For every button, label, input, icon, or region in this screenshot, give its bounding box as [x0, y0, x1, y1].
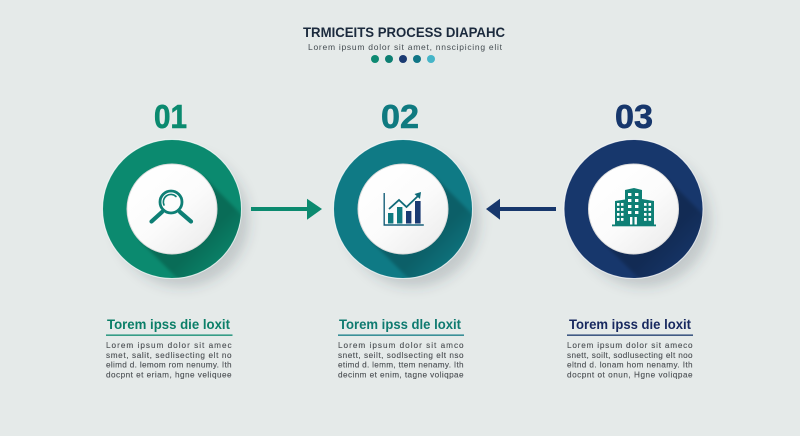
step 1 circle — [102, 139, 254, 292]
arrow: step 3 to step 2 — [486, 199, 556, 220]
subtitle: Lorem ipsum dolor sit amet, nnscipicing elit — [308, 42, 503, 52]
step 2 heading: Torem ipss dle loxit — [339, 317, 461, 332]
step 2 number: 02 — [381, 98, 419, 135]
panel: step 2 text — [338, 317, 464, 380]
header — [303, 24, 505, 63]
panel: step 3 text — [567, 317, 693, 380]
step 3 body text: eltnd d. lonam hom nenamy. Ith — [567, 360, 693, 370]
step 1 number: 01 — [154, 98, 187, 135]
step 3 body text: docpnt ot onun, Hgne voliqpae — [567, 370, 693, 380]
icon: growth chart — [384, 192, 424, 225]
step 3 body text: snett, soilt, sodlusecting elt noo — [567, 351, 693, 360]
step 1 body text — [106, 341, 232, 380]
step 3 circle — [564, 139, 716, 292]
step 2 body text: Lorem ipsum dolor sit amco — [338, 341, 464, 350]
step 2 circle — [333, 139, 485, 292]
step 2 body text — [338, 341, 464, 380]
icon: magnifying glass — [152, 191, 191, 222]
arrow: step 1 to step 2 — [251, 199, 322, 220]
step 1 heading: Torem ipss die loxit — [107, 317, 230, 332]
step 2 body text: etimd d. lemm, ttem nenamy. Ith — [338, 360, 464, 370]
panel: step 1 text — [106, 317, 232, 380]
step 3 heading: Torem ipss die loxit — [569, 317, 691, 332]
pagination dots — [371, 55, 435, 63]
step 1 body text: smet, salit, sedlisecting elt no — [106, 351, 232, 360]
step 3 number: 03 — [615, 98, 653, 135]
icon: office buildings — [612, 188, 656, 226]
step 2 body text: decinm et enim, tagne voliqpae — [338, 370, 464, 380]
step 3 body text — [567, 341, 693, 380]
step 1 body text: elimd d. lemom rom nenumy. Ith — [106, 360, 232, 370]
step 1 body text: docpnt et eriam, hgne veliquee — [106, 370, 232, 380]
step 2 body text: snett, seilt, sodlsecting elt nso — [338, 351, 464, 360]
title: TRMICEITS PROCESS DIAPAHC — [303, 24, 505, 40]
step 3 body text: Lorem ipsum dolor sit ameco — [567, 341, 693, 350]
step 1 body text: Lorem ipsum dolor sit amec — [106, 341, 232, 350]
